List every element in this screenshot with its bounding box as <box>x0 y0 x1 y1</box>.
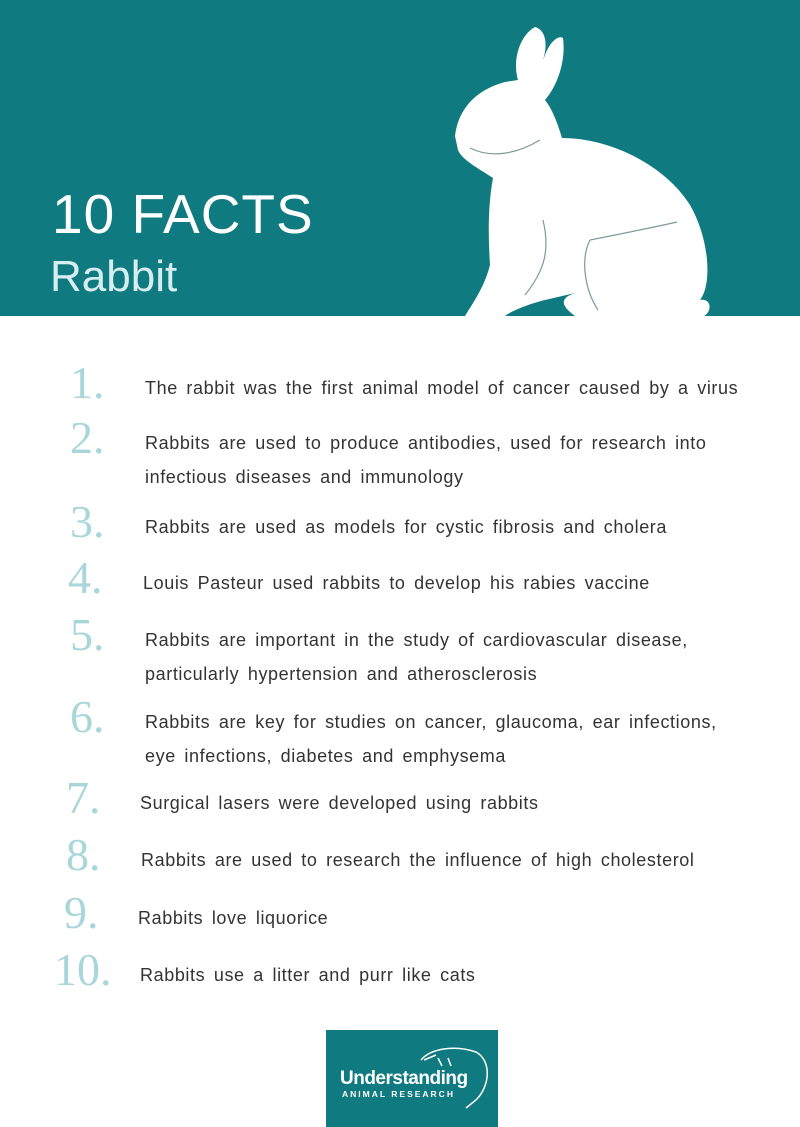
fact 6 <box>70 691 717 766</box>
text: 2. <box>70 412 104 463</box>
subtitle: Rabbit <box>50 252 177 301</box>
fact 2 <box>70 412 707 487</box>
text: 9. <box>64 887 98 938</box>
text: Surgical lasers were developed using rabbits <box>140 793 539 813</box>
fact 8 <box>66 829 694 880</box>
fact 7 <box>66 772 539 823</box>
text: Rabbits are used to produce antibodies, used for research into <box>145 433 707 453</box>
fact 4 <box>68 552 650 603</box>
text: The rabbit was the first animal model of cancer caused by a virus <box>145 378 738 398</box>
header banner <box>0 0 800 316</box>
text: 8. <box>66 829 100 880</box>
text: Rabbits are used as models for cystic fibrosis and cholera <box>145 517 667 537</box>
fact 5 <box>70 609 688 684</box>
text: Rabbits love liquorice <box>138 908 328 928</box>
text: Rabbits use a litter and purr like cats <box>140 965 476 985</box>
text: 4. <box>68 552 102 603</box>
logo: Understanding Animal Research <box>326 1030 498 1127</box>
fact 3 <box>70 496 667 547</box>
logo: Understanding Animal Research: Understanding <box>340 1068 468 1089</box>
text: Louis Pasteur used rabbits to develop his rabies vaccine <box>143 573 650 593</box>
fact 10 <box>54 944 476 995</box>
icon: rabbit silhouette <box>455 27 710 316</box>
title: 10 FACTS <box>52 183 314 245</box>
text: 6. <box>70 691 104 742</box>
fact 9 <box>64 887 328 938</box>
fact 1 <box>70 357 738 408</box>
text: 3. <box>70 496 104 547</box>
text: infectious diseases and immunology <box>145 467 464 487</box>
text: Rabbits are key for studies on cancer, glaucoma, ear infections, <box>145 712 717 732</box>
text: particularly hypertension and atherosclerosis <box>145 664 537 684</box>
logo: Understanding Animal Research: ANIMAL RESEARCH <box>342 1089 455 1099</box>
text: eye infections, diabetes and emphysema <box>145 746 506 766</box>
text: Rabbits are used to research the influence of high cholesterol <box>141 850 694 870</box>
text: 5. <box>70 609 104 660</box>
text: Rabbits are important in the study of cardiovascular disease, <box>145 630 688 650</box>
text: 7. <box>66 772 100 823</box>
text: 1. <box>70 357 104 408</box>
text: 10. <box>54 944 112 995</box>
